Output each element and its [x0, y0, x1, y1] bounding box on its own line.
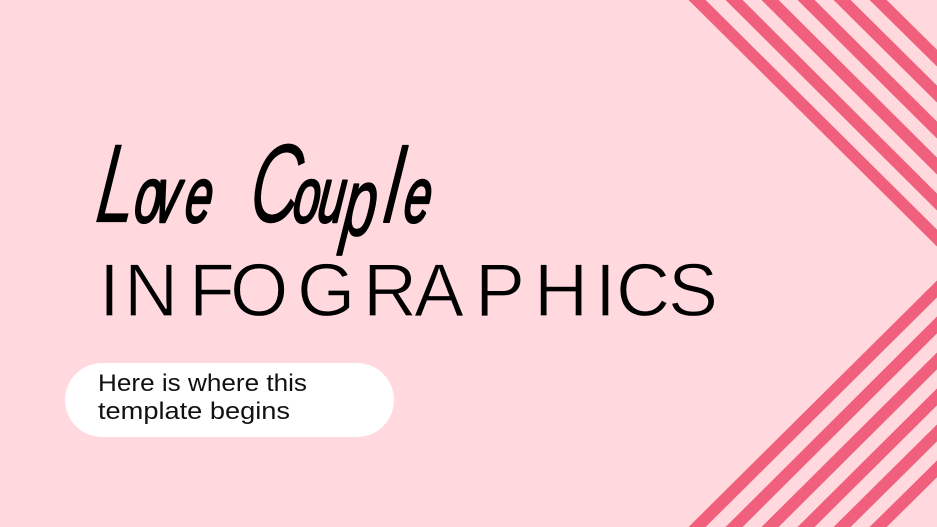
title: Love Couple: e — [400, 151, 438, 239]
title: Love Couple: C — [244, 121, 310, 246]
title: Love Couple: u — [314, 151, 352, 239]
top-right diagonal stripes — [687, 0, 937, 248]
title: Love Couple: o — [289, 151, 327, 239]
title: Love Couple: v — [151, 151, 189, 239]
subtitle: INFOGRAPHICS: INFOGRAPHICS — [99, 248, 718, 332]
pill callout — [65, 363, 394, 437]
pill text: Here is where this — [98, 370, 307, 397]
pill text: template begins — [98, 398, 290, 425]
title: Love Couple: p — [337, 149, 385, 255]
title: Love Couple: L — [91, 121, 145, 246]
bottom-right diagonal stripes — [687, 279, 937, 527]
title: Love Couple: l — [380, 127, 411, 245]
title: Love Couple: o — [130, 151, 168, 239]
title: Love Couple: e — [181, 151, 219, 239]
